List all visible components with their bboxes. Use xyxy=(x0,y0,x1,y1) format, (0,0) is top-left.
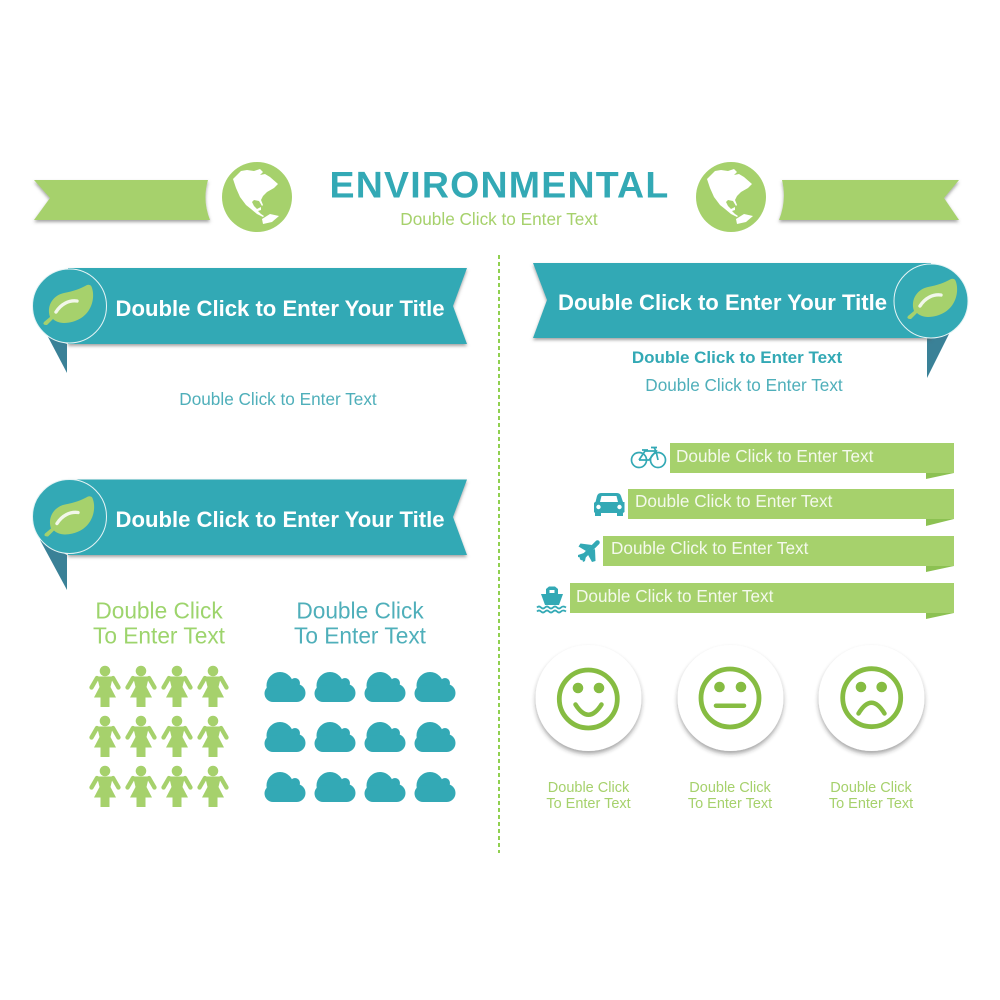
list item: bicycle: Double Click to Enter Text xyxy=(676,446,874,466)
icon: sad face xyxy=(818,645,924,751)
list item: car xyxy=(594,489,954,526)
panel: left title banner one xyxy=(32,268,467,373)
caption: neutral: Double Click xyxy=(689,780,771,796)
list item: ship: Double Click to Enter Text xyxy=(576,586,774,606)
caption: sad: To Enter Text xyxy=(829,796,913,812)
pictogram: clouds xyxy=(264,672,456,802)
caption: happy: Double Click xyxy=(548,780,630,796)
panel: right title banner xyxy=(533,263,968,378)
text block: left one: Double Click to Enter Text xyxy=(179,389,377,409)
text block: clouds label: Double Click xyxy=(296,598,424,624)
panel: left title banner one: Double Click to Enter Your Title xyxy=(116,296,444,321)
text block: right bold heading: Double Click to Enter Text xyxy=(632,348,842,367)
panel: right title banner: Double Click to Enter Your Title xyxy=(558,290,887,315)
panel: left title banner two: Double Click to Enter Your Title xyxy=(116,507,444,532)
panel: left title banner two xyxy=(32,480,467,590)
list item: ship xyxy=(537,583,954,619)
icon: neutral face xyxy=(678,645,784,751)
caption: neutral: To Enter Text xyxy=(688,796,772,812)
subtitle: Double Click to Enter Text xyxy=(400,209,598,229)
list item: plane: Double Click to Enter Text xyxy=(611,538,809,558)
icon: left globe xyxy=(222,162,292,232)
pictogram: people xyxy=(92,666,226,807)
list item: bicycle xyxy=(632,443,954,479)
divider xyxy=(498,255,500,853)
banner: top right green ribbon xyxy=(779,180,959,220)
banner: top left green ribbon xyxy=(34,180,210,220)
text block: people label: To Enter Text xyxy=(93,622,226,648)
title: ENVIRONMENTAL xyxy=(330,164,669,206)
icon: right globe xyxy=(696,162,766,232)
list item: car: Double Click to Enter Text xyxy=(635,491,833,511)
text block: people label: Double Click xyxy=(95,598,223,624)
text block: right subheading: Double Click to Enter Text xyxy=(645,375,843,395)
icon: happy face xyxy=(536,645,642,751)
caption: sad: Double Click xyxy=(830,780,912,796)
text block: clouds label: To Enter Text xyxy=(294,622,427,648)
list item: plane xyxy=(578,536,954,572)
caption: happy: To Enter Text xyxy=(546,796,631,812)
